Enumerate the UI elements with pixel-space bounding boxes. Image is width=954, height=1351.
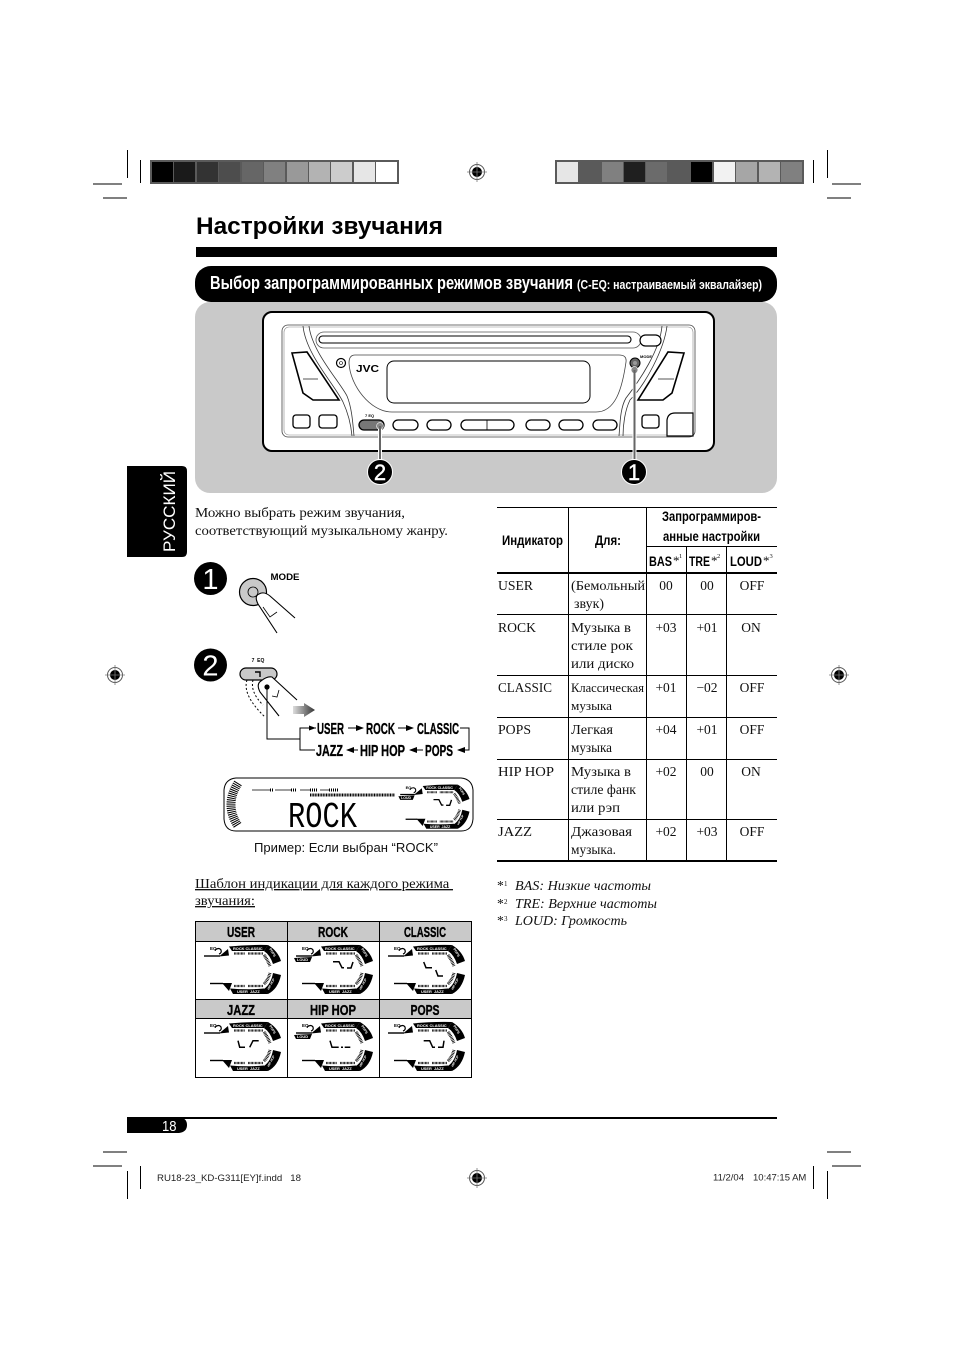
eq pattern: jazz: EQ: [210, 1023, 217, 1028]
pattern caption: [195, 876, 453, 908]
cd slot: [316, 332, 641, 348]
mode cycle diagram: HIP HOP: [360, 743, 405, 760]
row: rock: +03: [655, 620, 677, 635]
footer rule: [127, 1117, 777, 1119]
footnotes: TRE: Верхние частоты: [515, 896, 657, 911]
eq pattern: user: HIP HOP: [266, 978, 276, 990]
registration mark left: [105, 665, 125, 685]
presets table: [497, 507, 777, 862]
eq pattern: rock: POPS: [360, 947, 369, 958]
row: classic: музыка: [571, 699, 612, 713]
table header footnote marks: *: [763, 553, 770, 568]
mode cycle diagram: POPS: [425, 743, 453, 760]
registration mark right: [829, 665, 849, 685]
language tab: РУССКИЙ: [160, 471, 179, 552]
lcd eq indicators: HIP HOP: [456, 814, 465, 826]
lcd eq indicators: POPS: [458, 787, 466, 796]
mode cycle diagram: [300, 721, 469, 760]
row: jazz: +02: [655, 824, 677, 839]
pattern caption: звучания:: [195, 893, 255, 908]
right arrow button: [638, 352, 684, 400]
table header text: TRE: [689, 554, 710, 569]
eq pattern: user: [204, 945, 281, 994]
gradient arrow: [293, 703, 315, 717]
step 2: press eq: [194, 648, 469, 760]
eq pattern: hip hop: POPS: [360, 1024, 369, 1035]
left arrow button: [292, 352, 339, 400]
eq pattern: hip hop: LOUD: [297, 1034, 308, 1039]
row: rock: Музыка в: [571, 620, 631, 635]
table header text: Для:: [595, 533, 621, 548]
footnotes: 2: [504, 898, 508, 906]
row: hip hop: стиле фанк: [571, 782, 636, 797]
eq pattern: user: EQ: [210, 946, 217, 951]
footnotes: 1: [504, 880, 508, 888]
row: pops: [498, 722, 765, 755]
eq pattern: rock: EQ: [302, 946, 309, 951]
row: user: (Бемольный: [571, 578, 645, 593]
row: user: OFF: [740, 578, 765, 593]
eq pattern: hip hop: ROCK CLASSIC: [325, 1023, 355, 1028]
crop marks top left: [93, 150, 140, 198]
eq pattern: user: POPS: [268, 947, 277, 958]
eq pattern: pops: POPS: [452, 1024, 461, 1035]
row: classic: [498, 680, 765, 713]
row: user: 00: [700, 578, 714, 593]
row: user: USER: [498, 578, 533, 593]
lcd caption: Пример: Если выбран “ROCK”: [254, 840, 438, 855]
pattern table: [196, 922, 472, 1078]
row: user: 00: [659, 578, 673, 593]
pattern table: POPS: [410, 1003, 440, 1019]
row: rock: [498, 620, 761, 671]
eq pattern: hip hop: EQ: [302, 1023, 309, 1028]
table header footnote marks: 3: [770, 553, 773, 560]
row: hip hop: 00: [700, 764, 714, 779]
eq label: 7 EQ: [252, 658, 264, 664]
lcd eq indicators: EQ: [406, 785, 411, 790]
mode knob: [630, 354, 652, 368]
display: [349, 355, 626, 412]
table header footnote marks: 2: [717, 553, 720, 560]
table header text: анные настройки: [663, 529, 760, 544]
print slug left: RU18-23_KD-G311[EY]f.indd 18: [157, 1173, 301, 1184]
table header footnote marks: *: [673, 553, 680, 568]
row: rock: +01: [696, 620, 718, 635]
lcd eq indicators: ROCK CLASSIC: [426, 786, 453, 790]
row: pops: +01: [696, 722, 718, 737]
row: classic: −02: [696, 680, 718, 695]
eq pattern: pops: EQ: [394, 1023, 401, 1028]
pattern table: ROCK: [318, 925, 348, 941]
left knob: [336, 358, 346, 368]
table header footnote marks: 1: [679, 553, 682, 560]
number 2: 2: [202, 650, 219, 682]
eq pattern: rock: LOUD: [297, 957, 308, 962]
mode label: MODE: [270, 572, 300, 583]
eq pattern: classic: USER JAZZ: [421, 989, 444, 994]
table bottom rule: [497, 860, 777, 862]
table header text: [502, 509, 762, 569]
row: jazz: JAZZ: [498, 824, 532, 839]
callout 2: 2: [374, 460, 386, 485]
intro text: соответствующий музыкальному жанру.: [195, 523, 448, 538]
row: pops: OFF: [740, 722, 765, 737]
eq pattern: jazz: USER JAZZ: [237, 1066, 260, 1071]
row: hip hop: +02: [655, 764, 677, 779]
section heading bar: Выбор запрограммированных режимов звучания: [210, 272, 573, 293]
callout 1: [622, 367, 646, 485]
footnotes: BAS: Низкие частоты: [515, 878, 651, 893]
eq pattern: classic: ROCK CLASSIC: [417, 946, 447, 951]
row: classic: Классическая: [571, 681, 644, 695]
eq pattern: rock: [294, 945, 373, 994]
eq pattern: classic: HIP HOP: [450, 978, 460, 990]
callout 2: [368, 423, 392, 485]
print slug right: [713, 1172, 806, 1184]
lcd eq indicators: [398, 785, 470, 829]
mode cycle diagram: CLASSIC: [417, 721, 459, 738]
row: jazz: +03: [696, 824, 718, 839]
row: pops: POPS: [498, 722, 531, 737]
table header rule: [497, 572, 777, 574]
row: hip hop: [498, 764, 761, 815]
title: Настройки звучания: [196, 213, 443, 240]
corner panel: [667, 413, 693, 436]
eq pattern: pops: ROCK CLASSIC: [417, 1023, 447, 1028]
mode cycle diagram: ROCK: [366, 721, 396, 738]
row: jazz: музыка.: [571, 842, 616, 857]
row: hip hop: Музыка в: [571, 764, 631, 779]
pattern table: CLASSIC: [404, 925, 446, 941]
footnotes: *: [497, 896, 504, 911]
page number tab: [127, 1117, 187, 1135]
page number tab: 18: [162, 1118, 176, 1135]
car stereo illustration: [263, 312, 714, 451]
row: hip hop: ON: [741, 764, 761, 779]
eq pattern: rock: HIP HOP: [358, 978, 368, 990]
language tab: [127, 466, 187, 557]
title rule: [196, 247, 777, 257]
grayscale color bar left: [150, 160, 399, 184]
eq label: 7 EQ: [365, 413, 374, 418]
eq pattern: jazz: HIP HOP: [266, 1055, 276, 1067]
row: jazz: Джазовая: [571, 824, 632, 839]
table header text: Запрограммиров-: [662, 509, 761, 524]
intro text: [195, 505, 448, 538]
print slug right: 10:47:15 AM: [753, 1172, 806, 1184]
table grid: [497, 507, 777, 861]
section heading bar: (C-EQ: настраиваемый эквалайзер): [577, 278, 762, 292]
row: jazz: OFF: [740, 824, 765, 839]
print slug right: 11/2/04: [713, 1172, 744, 1184]
row: classic: CLASSIC: [498, 680, 552, 695]
eject button: [640, 335, 661, 346]
eq pattern: pops: USER JAZZ: [421, 1066, 444, 1071]
eq pattern: classic: EQ: [394, 946, 401, 951]
header labels: USER: [227, 925, 255, 941]
lcd eq indicators: LOUD: [401, 796, 411, 800]
number 1: 1: [202, 564, 219, 596]
crop marks bottom right: [814, 1152, 861, 1199]
mode cycle diagram: JAZZ: [316, 743, 343, 760]
row: user: [498, 578, 765, 611]
eq pattern: user: USER JAZZ: [237, 989, 260, 994]
eq pattern: jazz: POPS: [268, 1024, 277, 1035]
eq pattern: rock: ROCK CLASSIC: [325, 946, 355, 951]
crop marks top right: [814, 150, 861, 198]
mode cycle diagram: USER: [317, 721, 344, 738]
eq pattern: jazz: ROCK CLASSIC: [233, 1023, 263, 1028]
row: rock: ON: [741, 620, 761, 635]
pattern table: JAZZ: [227, 1003, 255, 1019]
table header text: BAS: [649, 554, 672, 569]
display: JVC: [356, 364, 379, 375]
footnotes: *: [497, 878, 504, 893]
eq pattern: hip hop: USER JAZZ: [329, 1066, 352, 1071]
crop marks bottom left: [93, 1152, 140, 1199]
square buttons: [293, 415, 659, 428]
intro text: Можно выбрать режим звучания,: [195, 505, 405, 520]
pattern caption: Шаблон индикации для каждого режима: [195, 876, 453, 891]
row: pops: Легкая: [571, 722, 613, 737]
step 1: press mode: [194, 562, 300, 633]
row: rock: ROCK: [498, 620, 536, 635]
grayscale color bar right: [555, 160, 804, 184]
row: classic: OFF: [740, 680, 765, 695]
footnotes: 3: [504, 915, 508, 923]
footnotes: *: [497, 913, 504, 928]
row: pops: музыка: [571, 740, 612, 755]
row: rock: или диско: [571, 656, 634, 671]
row: hip hop: HIP HOP: [498, 764, 554, 779]
eq pattern: classic: [388, 945, 465, 994]
registration mark top: [467, 162, 487, 182]
table header text: Индикатор: [502, 533, 563, 548]
eq pattern: pops: [388, 1022, 465, 1071]
eq pattern: user: ROCK CLASSIC: [233, 946, 263, 951]
row: user: звук): [574, 596, 604, 611]
eq pattern: rock: USER JAZZ: [329, 989, 352, 994]
footnotes: LOUD: Громкость: [514, 913, 627, 928]
row: hip hop: или рэп: [571, 800, 620, 815]
table header footnote marks: *: [711, 553, 718, 568]
table header footnote marks: [673, 553, 773, 568]
eq pattern: hip hop: [294, 1022, 373, 1071]
mode knob pressed: [240, 578, 295, 633]
lcd display example: [224, 778, 473, 838]
lcd eq indicators: USER JAZZ: [430, 825, 451, 829]
panel: stereo faceplate: [195, 266, 777, 493]
mode knob: MODE: [640, 354, 652, 359]
row: pops: +04: [655, 722, 677, 737]
eq pattern: classic: POPS: [452, 947, 461, 958]
section heading bar: [195, 266, 777, 302]
eq button with finger: [240, 668, 300, 739]
eq pattern: pops: HIP HOP: [450, 1055, 460, 1067]
preset buttons: [359, 420, 617, 430]
registration mark bottom: [467, 1168, 487, 1188]
row: rock: стиле рок: [571, 638, 633, 653]
lcd display example: ROCK: [288, 797, 357, 838]
eq pattern: hip hop: HIP HOP: [358, 1055, 368, 1067]
footnotes: [497, 878, 657, 928]
number 2: [194, 648, 227, 682]
callout 1: 1: [628, 460, 640, 485]
pattern table: HIP HOP: [310, 1003, 356, 1019]
table header text: LOUD: [730, 554, 762, 569]
eq pattern: jazz: [204, 1022, 281, 1071]
row: jazz: [498, 824, 765, 857]
row: classic: +01: [655, 680, 677, 695]
